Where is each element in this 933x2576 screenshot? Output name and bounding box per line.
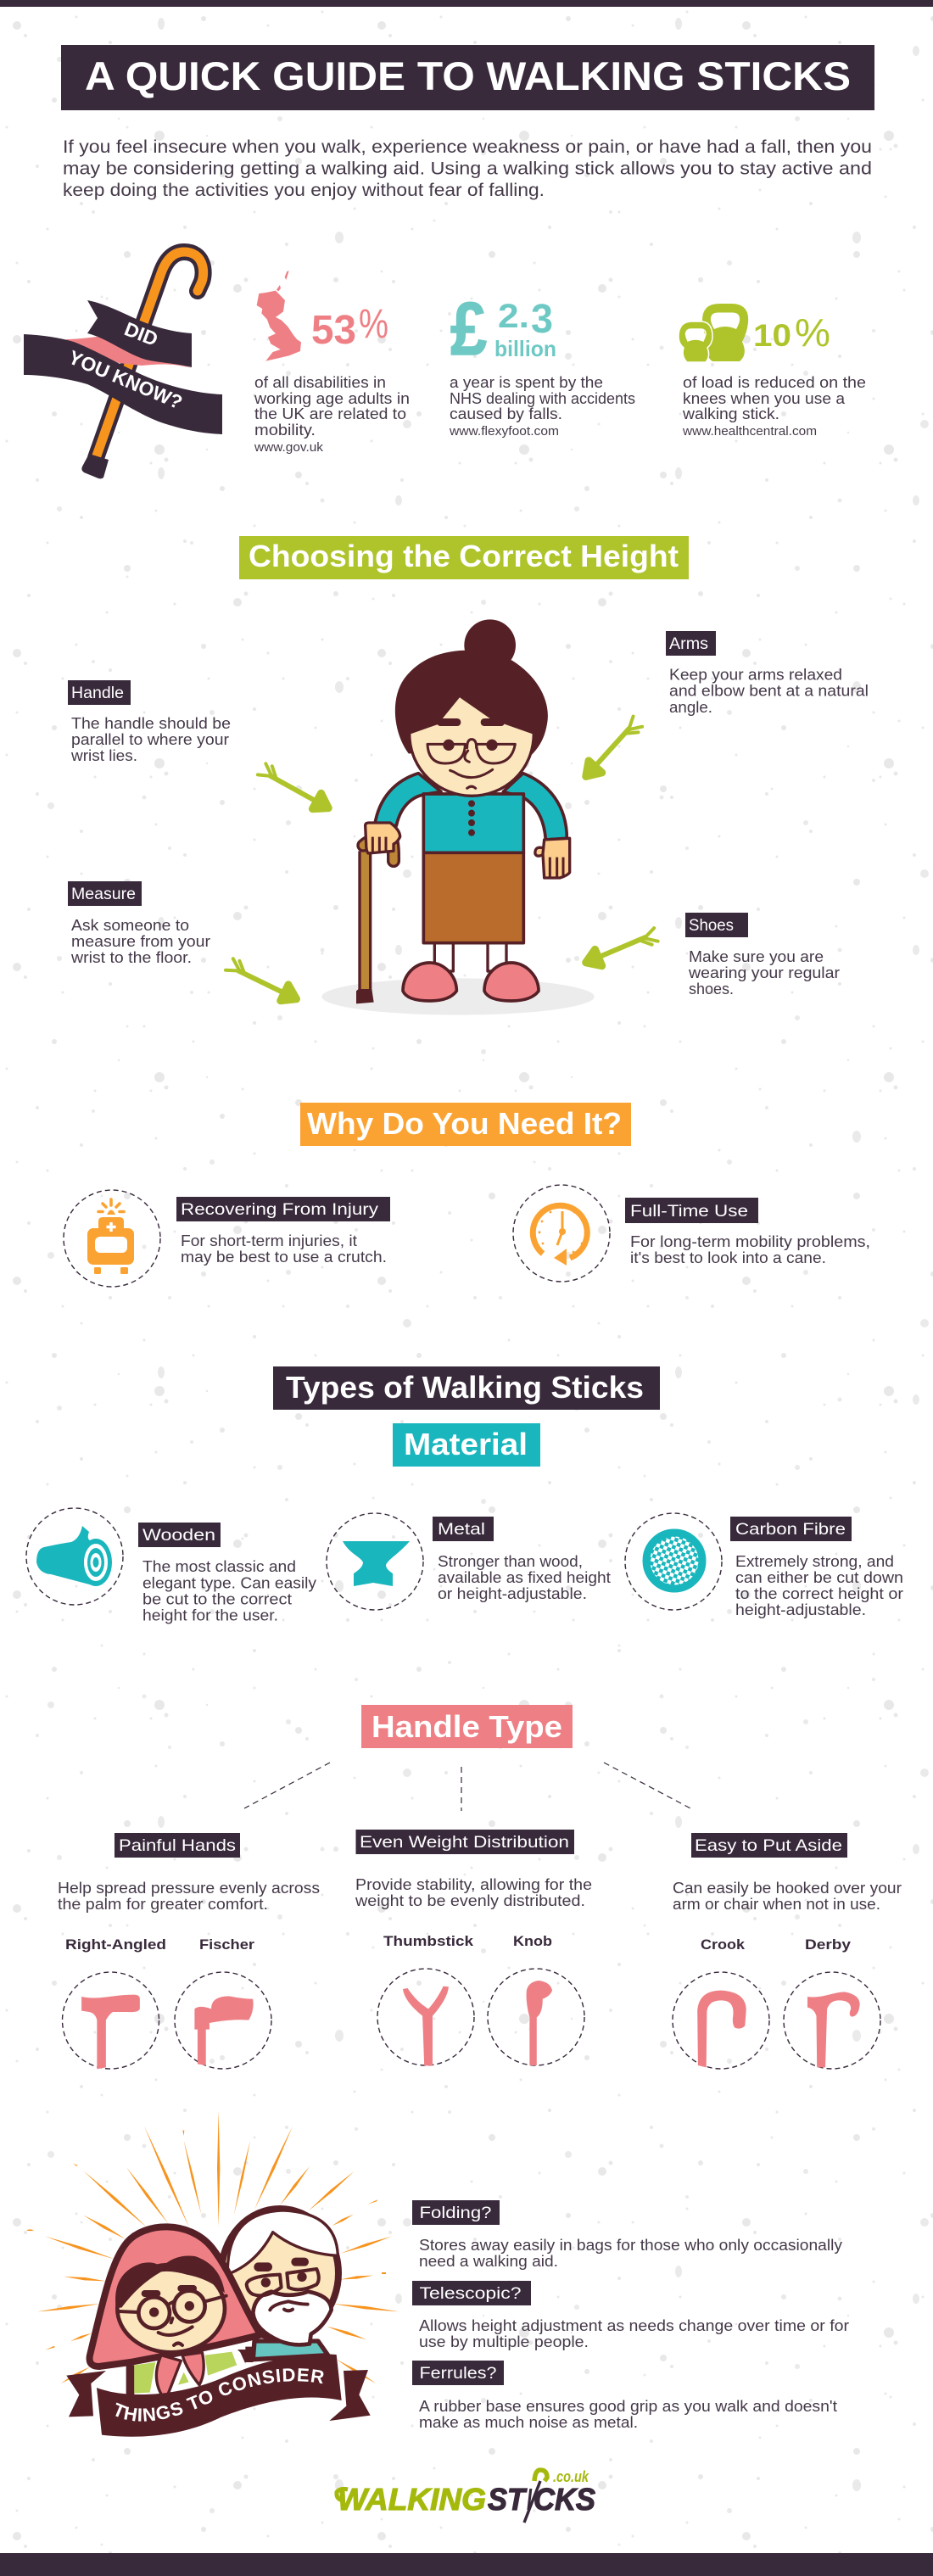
heading: handle type — [361, 1705, 573, 1748]
name: derby: Derby — [805, 1936, 852, 1953]
label: YOU KNOW?: YOU KNOW? — [65, 346, 186, 413]
label — [625, 1198, 758, 1223]
description: arm or chair when not in use. — [673, 1896, 880, 1913]
description: weight to be evenly distributed. — [355, 1892, 585, 1909]
name: knob: Knob — [513, 1933, 552, 1949]
label: Telescopic? — [419, 2284, 522, 2303]
label: Carbon Fibre — [735, 1520, 846, 1539]
logo: walking sticks: .co.uk — [553, 2468, 589, 2485]
panel: full-time use — [513, 1185, 870, 1282]
stat text: www.healthcentral.com — [682, 425, 817, 439]
label — [115, 1833, 240, 1858]
logo: walking sticks: I — [527, 2482, 533, 2517]
description: Stores away easily in bags for those who only occasionally — [419, 2237, 842, 2254]
description: parallel to where your — [71, 731, 229, 748]
icon: kettlebells — [679, 304, 748, 362]
label — [68, 881, 142, 906]
title — [61, 45, 874, 110]
icon: log — [26, 1508, 123, 1605]
label — [666, 631, 716, 656]
pound sign: £ — [450, 287, 487, 371]
icon: thumbstick handle — [377, 1969, 474, 2065]
icon: UK map — [257, 271, 301, 361]
description — [70, 715, 231, 764]
description: Help spread pressure evenly across — [58, 1880, 320, 1897]
label: Easy to Put Aside — [695, 1836, 842, 1855]
label — [138, 1523, 221, 1547]
description — [630, 1233, 870, 1266]
description: can either be cut down — [735, 1569, 903, 1586]
description: make as much noise as metal. — [419, 2414, 638, 2431]
description: measure from your — [71, 933, 210, 950]
logo: walking sticks: CKS — [534, 2482, 595, 2517]
description: height for the user. — [142, 1607, 278, 1623]
number — [753, 310, 830, 355]
description — [688, 948, 840, 997]
label — [412, 2361, 504, 2385]
stat text: NHS dealing with accidents — [450, 390, 635, 407]
heading: why do you need it: Why Do You Need It? — [307, 1106, 622, 1141]
arrow: to shoes — [583, 925, 660, 971]
stat text: of load is reduced on the — [683, 374, 866, 391]
panel: easy to put aside — [673, 1833, 902, 2069]
description: For long-term mobility problems, — [630, 1233, 870, 1250]
description: The handle should be — [71, 715, 231, 732]
description: angle. — [669, 699, 712, 716]
panel: painful hands — [58, 1833, 320, 2069]
stat text — [682, 374, 866, 439]
description — [419, 2317, 849, 2350]
number — [498, 297, 553, 342]
stat number — [311, 302, 388, 353]
description: wrist lies. — [70, 747, 137, 764]
cane ferrule — [81, 454, 109, 478]
stat text: a year is spent by the — [450, 374, 603, 391]
ribbon: YOU KNOW — [24, 334, 222, 434]
panel: folding — [412, 2200, 842, 2270]
intro paragraph: If you feel insecure when you walk, experience weakness or pain, or have had a fall, then you — [63, 137, 872, 157]
stat number: % — [359, 302, 388, 347]
stat text: www.flexyfoot.com — [449, 425, 559, 439]
label: Painful Hands — [119, 1836, 236, 1855]
panel: metal — [327, 1513, 611, 1610]
panel: telescopic — [412, 2281, 849, 2350]
icon: anvil — [327, 1513, 423, 1610]
description — [181, 1232, 387, 1266]
description — [70, 917, 210, 966]
description — [735, 1553, 903, 1618]
name: thumbstick: Thumbstick — [383, 1933, 474, 1949]
number: 10 — [753, 318, 791, 353]
banner — [97, 2354, 342, 2437]
stat text: mobility. — [254, 422, 316, 439]
ribbon: DID — [87, 300, 192, 367]
label: Measure — [71, 885, 136, 903]
label — [685, 913, 748, 937]
callout: handle — [68, 680, 231, 764]
icon: carbon weave — [625, 1513, 722, 1610]
description: shoes. — [689, 981, 734, 997]
title: A QUICK GUIDE TO WALKING STICKS — [85, 53, 851, 98]
woman — [90, 2227, 260, 2400]
heading: material: Material — [404, 1427, 528, 1461]
description: it's best to look into a cane. — [630, 1249, 826, 1266]
stat text — [449, 374, 635, 439]
arrow: to arm — [579, 714, 644, 783]
stat text: the UK are related to — [254, 405, 406, 422]
description — [669, 667, 869, 716]
description: the palm for greater comfort. — [58, 1896, 268, 1913]
label: Folding? — [419, 2204, 492, 2222]
icon: cane — [96, 252, 204, 458]
stat: 2.3 billion — [449, 287, 635, 439]
label: Handle — [71, 684, 124, 702]
intro paragraph: keep doing the activities you enjoy without fear of falling. — [63, 181, 545, 200]
name: fischer: Fischer — [199, 1936, 254, 1953]
stat text: walking stick. — [682, 405, 779, 422]
label — [691, 1833, 847, 1858]
label — [412, 2200, 500, 2225]
description: Keep your arms relaxed — [669, 667, 842, 684]
description: use by multiple people. — [419, 2333, 589, 2350]
man — [221, 2209, 338, 2360]
icon: knob handle — [488, 1969, 584, 2065]
arrow: to floor — [224, 957, 300, 1007]
description — [438, 1553, 611, 1602]
icon: fischer handle — [175, 1972, 271, 2069]
description: Extremely strong, and — [735, 1553, 894, 1570]
label: Recovering From Injury — [181, 1200, 378, 1219]
icon: clock — [513, 1185, 610, 1282]
description: or height-adjustable. — [438, 1585, 587, 1602]
stat text: www.gov.uk — [254, 441, 324, 455]
description: Can easily be hooked over your — [673, 1880, 902, 1897]
description: available as fixed height — [438, 1569, 611, 1586]
panel: ferrules — [412, 2361, 837, 2431]
stat: 53 percent — [254, 271, 410, 455]
stat text: working age adults in — [254, 390, 410, 407]
description — [419, 2398, 837, 2431]
panel: recovering from injury — [64, 1190, 390, 1287]
name: right-angled: Right-Angled — [65, 1936, 166, 1953]
label — [730, 1517, 852, 1541]
description: to the correct height or — [735, 1585, 903, 1602]
description: Make sure you are — [689, 948, 824, 965]
description: Ask someone to — [71, 917, 189, 934]
description: A rubber base ensures good grip as you walk and doesn't — [419, 2398, 837, 2415]
description: and elbow bent at a natural — [669, 682, 869, 699]
stat: 10 percent — [679, 304, 866, 439]
top bar — [0, 0, 933, 7]
stat text — [254, 374, 410, 455]
description: The most classic and — [142, 1558, 296, 1575]
logo: walking sticks: ST — [488, 2482, 528, 2517]
icon: crook handle — [673, 1972, 769, 2069]
name: crook: Crook — [701, 1936, 746, 1953]
label — [356, 1830, 574, 1854]
panel: carbon fibre — [625, 1513, 903, 1618]
pink ribbon fold — [65, 336, 192, 368]
label — [176, 1197, 390, 1221]
icon: right-angled handle — [63, 1972, 159, 2069]
banner tails — [66, 2370, 371, 2421]
callout: arms — [666, 631, 869, 716]
heading: handle type: Handle Type — [372, 1709, 562, 1744]
stat text: caused by falls. — [450, 405, 562, 422]
description: be cut to the correct — [142, 1591, 292, 1608]
panel: even weight distribution — [355, 1830, 592, 2065]
stat text: knees when you use a — [683, 390, 846, 407]
icon: derby handle — [784, 1972, 880, 2069]
description: Stronger than wood, — [438, 1553, 583, 1570]
logo: walking sticks: WALKING — [338, 2482, 486, 2517]
panel: wooden — [26, 1508, 316, 1623]
callout: measure — [68, 881, 210, 966]
label: Even Weight Distribution — [360, 1833, 569, 1852]
intro paragraph — [63, 137, 872, 200]
banner text: THINGS TO CONSIDER — [115, 2368, 324, 2422]
heading: choosing the correct height: Choosing the Correct Height — [249, 539, 679, 573]
label: Ferrules? — [419, 2364, 497, 2383]
sun rays — [26, 2110, 399, 2383]
heading: material — [393, 1423, 540, 1467]
description — [58, 1880, 320, 1913]
number: 2. — [498, 298, 529, 335]
label — [68, 680, 131, 705]
label: Full-Time Use — [630, 1202, 748, 1221]
logo: walking sticks — [337, 2468, 595, 2523]
label: Metal — [438, 1520, 485, 1539]
description — [419, 2237, 842, 2270]
label: Arms — [669, 634, 708, 653]
description: wrist to the floor. — [70, 949, 192, 966]
description: Allows height adjustment as needs change over time or for — [419, 2317, 849, 2334]
arrow: to handle — [256, 762, 333, 815]
label: DID: DID — [121, 317, 161, 350]
heading: types of walking sticks: Types of Walking Sticks — [286, 1370, 644, 1405]
description: height-adjustable. — [735, 1601, 866, 1618]
label — [412, 2281, 531, 2305]
intro paragraph: may be considering getting a walking aid. Using a walking stick allows you to stay active and — [63, 159, 872, 178]
icon: medical bag — [64, 1190, 160, 1287]
label — [433, 1517, 494, 1541]
callout: shoes — [685, 913, 840, 997]
description: Provide stability, allowing for the — [355, 1876, 592, 1893]
description: wearing your regular — [688, 964, 840, 981]
bottom bar — [0, 2553, 933, 2576]
description — [673, 1880, 902, 1913]
label: Wooden — [142, 1526, 215, 1545]
number: % — [795, 310, 830, 355]
illustration: things to consider couple — [26, 2111, 399, 2437]
description — [142, 1558, 316, 1623]
description: For short-term injuries, it — [181, 1232, 357, 1249]
description: need a walking aid. — [419, 2253, 558, 2270]
billion: billion — [494, 336, 556, 361]
description: may be best to use a crutch. — [181, 1249, 387, 1266]
illustration: grandmother with cane — [321, 619, 595, 1015]
number: 3 — [531, 297, 553, 342]
description: elegant type. Can easily — [142, 1574, 316, 1591]
did you know badge — [24, 252, 222, 478]
stat text: of all disabilities in — [254, 374, 386, 391]
description — [355, 1876, 592, 1909]
label: Shoes — [689, 916, 734, 935]
stat number: 53 — [311, 308, 356, 353]
